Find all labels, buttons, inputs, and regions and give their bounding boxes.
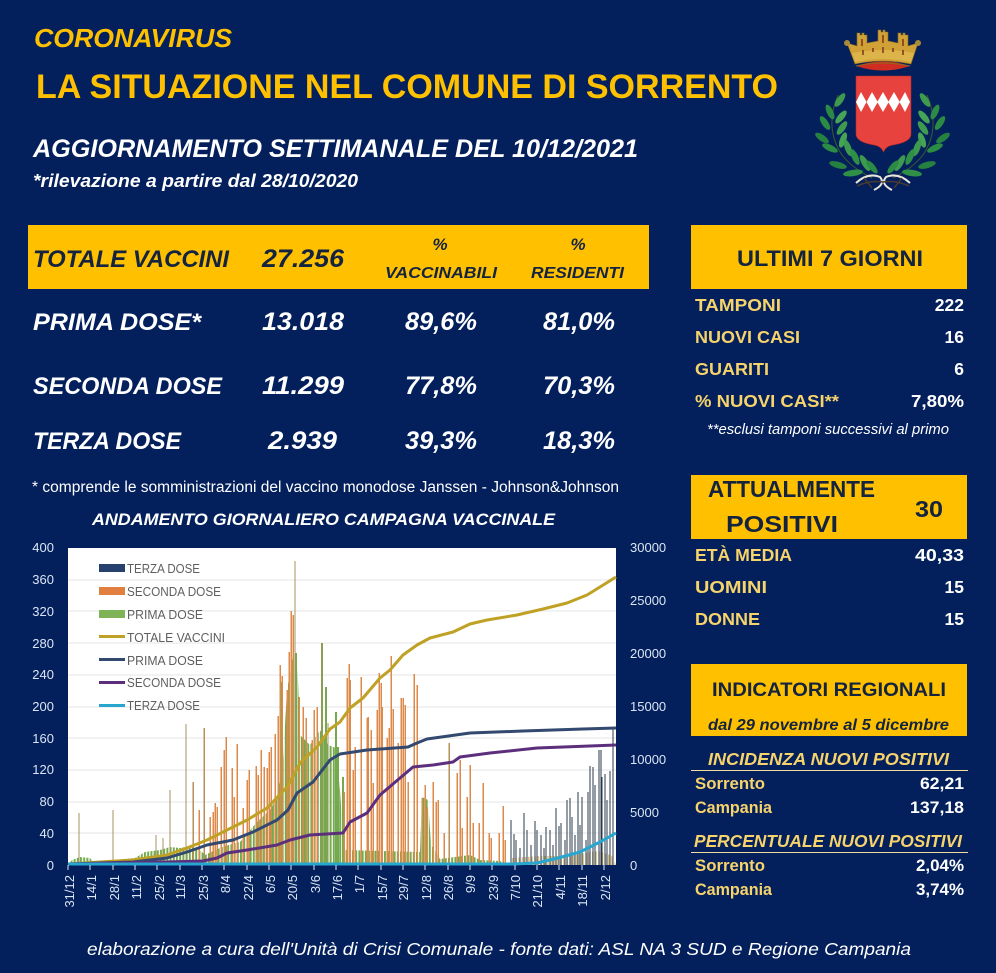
row: Sorrento incidence <box>695 775 964 793</box>
header: % eligible: % <box>432 235 448 254</box>
row: Campania incidence: 137,18 <box>910 799 964 817</box>
x axis date labels: 12/8 <box>419 875 434 900</box>
panel: vaccine table <box>28 225 649 496</box>
row: second dose: 70,3% <box>543 372 615 400</box>
header: total value: 27.256 <box>261 245 345 273</box>
row: mean age: 40,33 <box>915 545 964 565</box>
x axis date labels: 31/12 <box>62 875 77 908</box>
x axis date labels: 14/1 <box>84 875 99 900</box>
bars: late low values <box>510 851 616 865</box>
chart title: ANDAMENTO GIORNALIERO CAMPAGNA VACCINALE <box>91 511 556 529</box>
left axis labels: 320 <box>32 604 54 619</box>
line: third dose <box>68 833 616 864</box>
row: recovered: 6 <box>954 359 964 379</box>
line: second dose <box>68 745 616 864</box>
row: new cases: 16 <box>945 327 964 347</box>
legend: SECONDA DOSE <box>127 676 221 690</box>
legend <box>99 562 225 713</box>
title: coronavirus: CORONAVIRUS <box>34 23 233 53</box>
panel header <box>691 475 967 539</box>
panel heading text: INDICATORI REGIONALI <box>712 679 946 701</box>
x axis date labels: 1/7 <box>352 875 367 893</box>
row: recovered: GUARITI <box>695 359 769 379</box>
left axis labels: 120 <box>32 762 54 777</box>
x axis date labels: 20/5 <box>285 875 300 900</box>
x axis date labels: 2/12 <box>598 875 613 900</box>
right axis labels: 5000 <box>630 805 659 820</box>
bars: third dose <box>511 727 613 865</box>
x axis date labels: 22/4 <box>241 875 256 900</box>
right axis labels: 20000 <box>630 646 666 661</box>
x axis date labels: 29/7 <box>396 875 411 900</box>
row: % new cases: % NUOVI CASI** <box>695 391 839 411</box>
line: total vaccines <box>68 577 616 864</box>
left axis labels: 360 <box>32 572 54 587</box>
row: men <box>695 577 964 597</box>
x axis date labels: 7/10 <box>508 875 523 900</box>
bars: olive overlap peaks <box>79 561 449 865</box>
row: men: 15 <box>945 577 964 597</box>
right axis labels: 30000 <box>630 540 666 555</box>
row: Sorrento percentage <box>695 857 964 875</box>
row: Sorrento percentage: 2,04% <box>916 857 964 875</box>
row: Sorrento incidence: Sorrento <box>695 775 765 793</box>
row: swabs <box>695 295 964 315</box>
note: **esclusi tamponi successivi al primo <box>707 422 949 438</box>
positive count: 30 <box>915 496 943 522</box>
panel heading text: ULTIMI 7 GIORNI <box>737 246 923 271</box>
right axis labels: 15000 <box>630 699 666 714</box>
note: survey start: *rilevazione a partire dal 28/10/2020 <box>33 171 358 191</box>
x axis date labels: 11/2 <box>129 875 144 899</box>
header: total vaccines: TOTALE VACCINI <box>33 246 230 273</box>
subheading: percentage: PERCENTUALE NUOVI POSITIVI <box>694 831 963 851</box>
x axis date labels: 18/11 <box>575 875 590 907</box>
panel header <box>691 664 967 736</box>
row: Campania incidence: Campania <box>695 799 773 817</box>
x axis date labels: 15/7 <box>375 875 390 900</box>
row: mean age: ETÀ MEDIA <box>695 544 792 565</box>
x axis date labels: 17/6 <box>330 875 345 900</box>
row: new cases <box>695 327 964 347</box>
row: women: DONNE <box>695 609 760 629</box>
legend: PRIMA DOSE <box>127 608 203 622</box>
left axis labels <box>32 540 54 873</box>
row: Campania percentage: 3,74% <box>916 881 964 899</box>
row: swabs: 222 <box>935 295 964 315</box>
row: third dose: 39,3% <box>405 427 477 455</box>
row: first dose <box>33 308 615 336</box>
header: % residents <box>531 235 625 282</box>
legend: SECONDA DOSE <box>127 585 221 599</box>
left axis labels: 160 <box>32 731 54 746</box>
row: second dose: 11.299 <box>262 372 344 400</box>
x axis date labels: 23/9 <box>486 875 501 900</box>
row: women: 15 <box>945 609 964 629</box>
row: second dose <box>33 372 615 400</box>
left axis labels: 200 <box>32 699 54 714</box>
row: men: UOMINI <box>695 577 767 597</box>
x axis date labels: 9/9 <box>463 875 478 893</box>
right axis labels: 0 <box>630 858 637 873</box>
line: first dose <box>68 728 616 864</box>
row: mean age <box>695 544 964 565</box>
footnote: * comprende le somministrazioni del vaccino monodose Janssen - Johnson&Johnson <box>32 479 619 496</box>
header: % residents: % <box>570 235 586 254</box>
left axis labels: 400 <box>32 540 54 555</box>
combo chart: daily vaccination campaign <box>32 540 666 908</box>
right axis labels <box>630 540 666 873</box>
row: second dose: SECONDA DOSE <box>33 373 223 400</box>
x axis date labels: 4/11 <box>553 875 568 899</box>
legend: TERZA DOSE <box>127 562 200 576</box>
legend: TOTALE VACCINI <box>127 631 225 645</box>
row: third dose <box>33 427 615 455</box>
bars: second dose <box>193 611 505 865</box>
row: new cases: NUOVI CASI <box>695 327 800 347</box>
row: second dose: 77,8% <box>405 372 477 400</box>
title: main heading: LA SITUAZIONE NEL COMUNE DI SORRENTO <box>36 68 778 106</box>
row: third dose: 18,3% <box>543 427 615 455</box>
row: first dose: 89,6% <box>405 308 477 336</box>
row: % new cases: 7,80% <box>911 391 964 411</box>
left axis labels: 0 <box>47 858 54 873</box>
plot area <box>68 548 616 865</box>
x axis date labels: 6/5 <box>263 875 278 893</box>
icon: Sorrento coat of arms <box>814 30 951 190</box>
x axis date labels: 11/3 <box>173 875 188 899</box>
row: swabs: TAMPONI <box>695 295 781 315</box>
footer credit: elaborazione a cura dell'Unità di Crisi Comunale - fonte dati: ASL NA 3 SUD e Regione Campania <box>87 939 911 959</box>
row: first dose: 81,0% <box>543 308 615 336</box>
row: third dose: TERZA DOSE <box>33 428 182 455</box>
table header band <box>28 225 649 289</box>
row: recovered <box>695 359 964 379</box>
panel header <box>691 225 967 289</box>
row: first dose: 13.018 <box>262 308 344 336</box>
row: Sorrento incidence: 62,21 <box>920 775 964 793</box>
row: Campania incidence <box>695 799 964 817</box>
panel: currently positive <box>691 475 967 629</box>
left axis labels: 280 <box>32 636 54 651</box>
row: Sorrento percentage: Sorrento <box>695 857 765 875</box>
panel: regional indicators <box>691 664 968 899</box>
x axis date labels: 21/10 <box>530 875 545 908</box>
row: first dose: PRIMA DOSE* <box>33 309 203 336</box>
panel heading text <box>708 476 875 537</box>
left axis labels: 240 <box>32 667 54 682</box>
legend: TERZA DOSE <box>127 699 200 713</box>
x axis date labels: 26/8 <box>441 875 456 900</box>
panel heading text: POSITIVI <box>726 511 838 537</box>
left axis labels: 80 <box>40 794 54 809</box>
header titles <box>32 23 778 191</box>
legend: PRIMA DOSE <box>127 654 203 668</box>
row: third dose: 2.939 <box>267 427 337 455</box>
right axis labels: 10000 <box>630 752 666 767</box>
right axis labels: 25000 <box>630 593 666 608</box>
header: % residents: RESIDENTI <box>531 265 625 282</box>
x axis date labels: 25/2 <box>152 875 167 900</box>
x axis date labels <box>62 865 613 908</box>
row: % new cases <box>695 391 964 411</box>
subtitle: weekly update: AGGIORNAMENTO SETTIMANALE DEL 10/12/2021 <box>32 135 638 163</box>
bars: first dose <box>68 643 510 865</box>
x axis date labels: 8/4 <box>218 875 233 893</box>
subheading: incidence: INCIDENZA NUOVI POSITIVI <box>708 749 950 769</box>
header: % eligible: VACCINABILI <box>385 265 498 282</box>
date range: dal 29 novembre al 5 dicembre <box>708 717 949 734</box>
x axis date labels: 28/1 <box>107 875 122 900</box>
row: women <box>695 609 964 629</box>
panel heading text: ATTUALMENTE <box>708 476 875 502</box>
row: Campania percentage: Campania <box>695 881 773 899</box>
header: % eligible <box>385 235 498 282</box>
x axis date labels: 3/6 <box>308 875 323 893</box>
panel: last 7 days <box>691 225 967 438</box>
left axis labels: 40 <box>40 826 54 841</box>
x axis date labels: 25/3 <box>196 875 211 900</box>
row: Campania percentage <box>695 881 964 899</box>
